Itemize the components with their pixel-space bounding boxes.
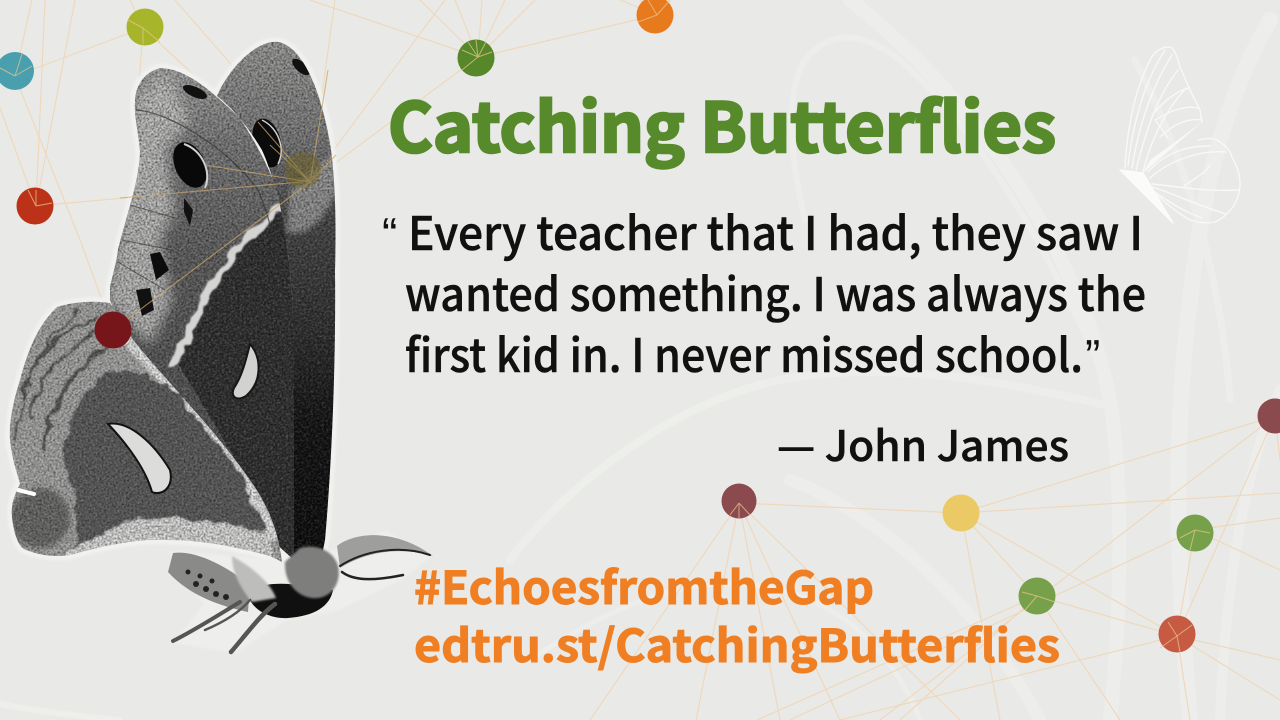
quote: first kid in. I never missed school. [405,320,1083,386]
node: orange [636,0,674,34]
node: maroon [722,484,756,518]
node: dark green [458,40,494,76]
hindwing grainy patch [63,370,263,548]
hindwing top pale edge [112,322,275,540]
moth antenna [337,535,433,579]
hashtag and link: #EchoesfromtheGap [414,552,874,617]
node: green mid [1018,578,1056,614]
white butterfly outline icon [1120,47,1240,223]
node: red [16,188,54,224]
moth hindwing [8,295,288,565]
moth abdomen [168,553,250,612]
hashtag and link: edtru.st/CatchingButterflies [414,610,1060,675]
network lines over moth [113,70,336,330]
quote: wanted something. I was always the [405,259,1146,325]
quote: Every teacher that I had, they saw I [408,198,1143,264]
moth white cut-out halo [10,42,430,652]
quote: “ [382,208,397,260]
moth back forewing [217,42,336,556]
hashtag and link [414,552,1060,675]
node: lime [126,8,164,46]
moth [8,30,433,652]
node: dark red on moth [94,312,132,348]
moth front forewing [110,68,294,558]
network lines: top left [0,0,670,330]
node: maroon right edge [1258,398,1280,434]
hindwing lower pale margin [66,516,275,560]
moth thorax [232,547,339,618]
node: yellow [942,494,980,532]
pale left band [105,72,190,345]
pale wavy band [173,204,285,366]
attribution: — John James [777,413,1069,474]
node: green right [1176,514,1214,552]
title: Catching Butterflies [388,73,1056,172]
network lines: bottom right [590,416,1280,720]
dark lower panel [177,210,298,565]
node: translucent olive on moth [285,152,321,188]
moth legs [173,600,275,652]
node: coral red [1158,616,1196,652]
quote [382,198,1146,386]
node: teal [0,52,34,90]
quote: ” [1085,330,1100,382]
